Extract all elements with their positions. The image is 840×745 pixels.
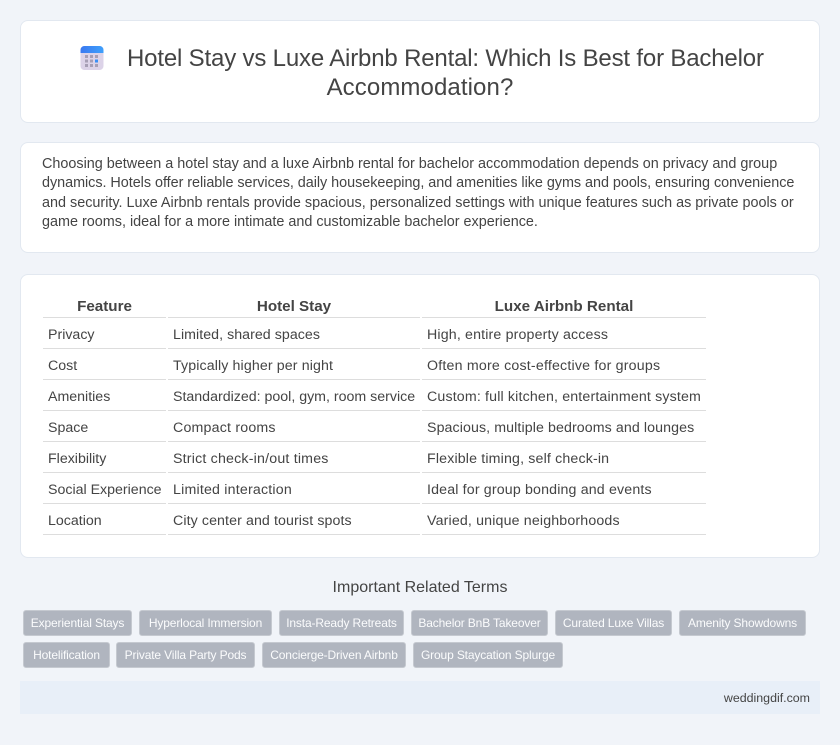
related terms heading: Important Related Terms bbox=[333, 579, 507, 596]
icon: calendar bbox=[80, 46, 104, 70]
header panel bbox=[20, 20, 820, 123]
text: Standardized: pool, gym, room service bbox=[173, 389, 415, 405]
text: Amenities bbox=[48, 389, 110, 405]
title: Hotel Stay vs Luxe Airbnb Rental: Which Is Best for Bachelor bbox=[127, 45, 764, 72]
text: Flexibility bbox=[48, 451, 106, 467]
text: Ideal for group bonding and events bbox=[427, 482, 652, 498]
related term tags: Hyperlocal Immersion bbox=[149, 616, 262, 630]
related term tags: Amenity Showdowns bbox=[688, 616, 797, 630]
intro text: dynamics. Hotels offer reliable services, daily housekeeping, and amenities like gyms and pools, ensuring convenience bbox=[42, 175, 794, 191]
text: Space bbox=[48, 420, 88, 436]
footer site name: weddingdif.com bbox=[724, 691, 810, 705]
text: Social Experience bbox=[48, 482, 162, 498]
intro text: and security. Luxe Airbnb rentals provide spacious, personalized settings with unique features such as private pools or bbox=[42, 195, 794, 211]
text: Compact rooms bbox=[173, 420, 276, 436]
title: Accommodation? bbox=[327, 74, 513, 101]
related term tags: Private Villa Party Pods bbox=[125, 648, 246, 662]
related term tags: Bachelor BnB Takeover bbox=[418, 616, 541, 630]
comparison table bbox=[43, 296, 707, 536]
intro text: Choosing between a hotel stay and a luxe Airbnb rental for bachelor accommodation depends on privacy and group bbox=[42, 156, 777, 172]
text: Strict check-in/out times bbox=[173, 451, 329, 467]
text: Limited, shared spaces bbox=[173, 327, 320, 343]
text: Luxe Airbnb Rental bbox=[495, 298, 633, 315]
text: Typically higher per night bbox=[173, 358, 333, 374]
related term tags: Group Staycation Splurge bbox=[421, 648, 555, 662]
text: Feature bbox=[77, 298, 132, 315]
related term tags: Insta-Ready Retreats bbox=[286, 616, 397, 630]
text: High, entire property access bbox=[427, 327, 608, 343]
text: Varied, unique neighborhoods bbox=[427, 513, 620, 529]
footer bar bbox=[20, 681, 820, 714]
text: Custom: full kitchen, entertainment system bbox=[427, 389, 701, 405]
text: Often more cost-effective for groups bbox=[427, 358, 660, 374]
text: Flexible timing, self check-in bbox=[427, 451, 609, 467]
title bbox=[127, 45, 764, 101]
text: Location bbox=[48, 513, 102, 529]
related term tags: Curated Luxe Villas bbox=[563, 616, 664, 630]
text: Privacy bbox=[48, 327, 95, 343]
intro panel bbox=[20, 142, 820, 253]
intro text: game rooms, ideal for a more intimate and customizable bachelor experience. bbox=[42, 214, 538, 230]
table panel bbox=[20, 274, 820, 558]
text: Cost bbox=[48, 358, 77, 374]
related term tags: Experiential Stays bbox=[31, 616, 124, 630]
intro text bbox=[42, 156, 794, 230]
text: Hotel Stay bbox=[257, 298, 331, 315]
related term tags: Hotelification bbox=[33, 648, 100, 662]
related term tags bbox=[23, 610, 806, 668]
related term tags: Concierge-Driven Airbnb bbox=[270, 648, 398, 662]
text: City center and tourist spots bbox=[173, 513, 352, 529]
text: Limited interaction bbox=[173, 482, 292, 498]
text: Spacious, multiple bedrooms and lounges bbox=[427, 420, 694, 436]
